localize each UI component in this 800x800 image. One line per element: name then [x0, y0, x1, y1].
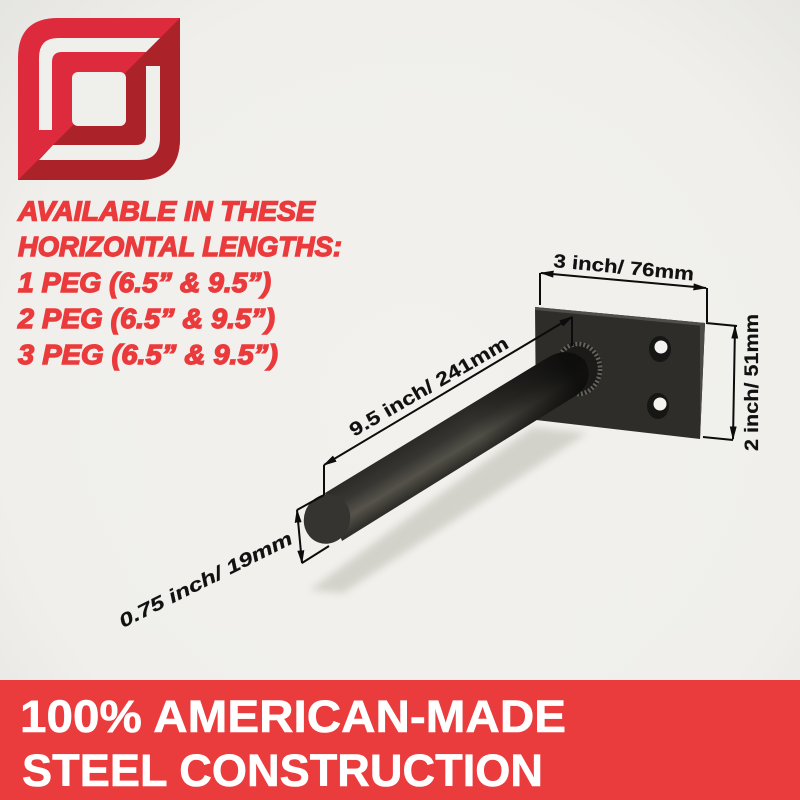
- bracket: mounting plate: [535, 307, 705, 439]
- dimension: peg length: 9.5 inch/ 241mm: [346, 333, 512, 441]
- banner heading: STEEL CONSTRUCTION: [22, 745, 543, 796]
- text block: available lengths: HORIZONTAL LENGTHS:: [18, 231, 342, 262]
- text block: available lengths: 2 PEG (6.5” & 9.5”): [17, 303, 275, 334]
- icon: upper mounting hole: [649, 336, 671, 362]
- dimension: peg diameter: [116, 495, 329, 632]
- dimension: plate width: [540, 251, 707, 322]
- banner heading: [20, 691, 566, 796]
- text block: available lengths: 3 PEG (6.5” & 9.5”): [18, 339, 278, 370]
- dimension: plate height: [703, 314, 763, 451]
- icon: lower mounting hole: [647, 393, 669, 419]
- dimension: peg diameter: 0.75 inch/ 19mm: [116, 528, 296, 632]
- icon: brand logo: [18, 18, 180, 180]
- text block: available lengths: [17, 196, 342, 370]
- dimension: plate height: 2 inch/ 51mm: [742, 314, 763, 451]
- bracket shadow: [310, 427, 587, 593]
- dimension: plate width: 3 inch/ 76mm: [553, 251, 695, 285]
- dimension: peg length: [324, 317, 572, 495]
- banner: [0, 680, 800, 800]
- bracket: weld ring: [554, 342, 602, 396]
- text block: available lengths: 1 PEG (6.5” & 9.5”): [18, 267, 271, 298]
- text block: available lengths: AVAILABLE IN THESE: [17, 196, 317, 226]
- bracket: round peg: [297, 352, 589, 550]
- banner heading: 100% AMERICAN-MADE: [20, 691, 566, 742]
